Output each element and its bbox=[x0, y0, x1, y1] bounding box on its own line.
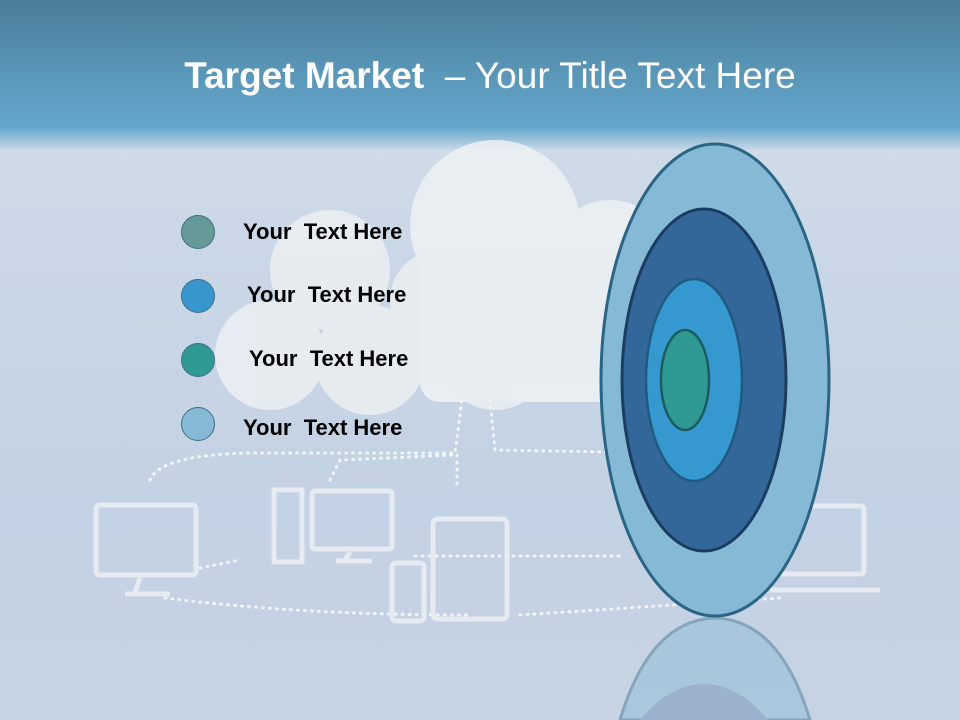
legend: Your Text Here bbox=[249, 346, 408, 371]
legend item 4 bbox=[181, 407, 402, 441]
legend bbox=[181, 215, 408, 441]
title: Target Market – Your Title Text Here bbox=[184, 55, 796, 96]
legend: Your Text Here bbox=[247, 282, 406, 307]
reflection bbox=[620, 618, 810, 720]
legend item 2 bbox=[181, 279, 406, 313]
legend: Your Text Here bbox=[243, 415, 402, 440]
header band bbox=[0, 0, 960, 150]
legend: Your Text Here bbox=[243, 219, 402, 244]
legend item 3 bbox=[181, 343, 408, 377]
target rings bbox=[601, 144, 829, 616]
legend item 1 bbox=[181, 215, 402, 249]
